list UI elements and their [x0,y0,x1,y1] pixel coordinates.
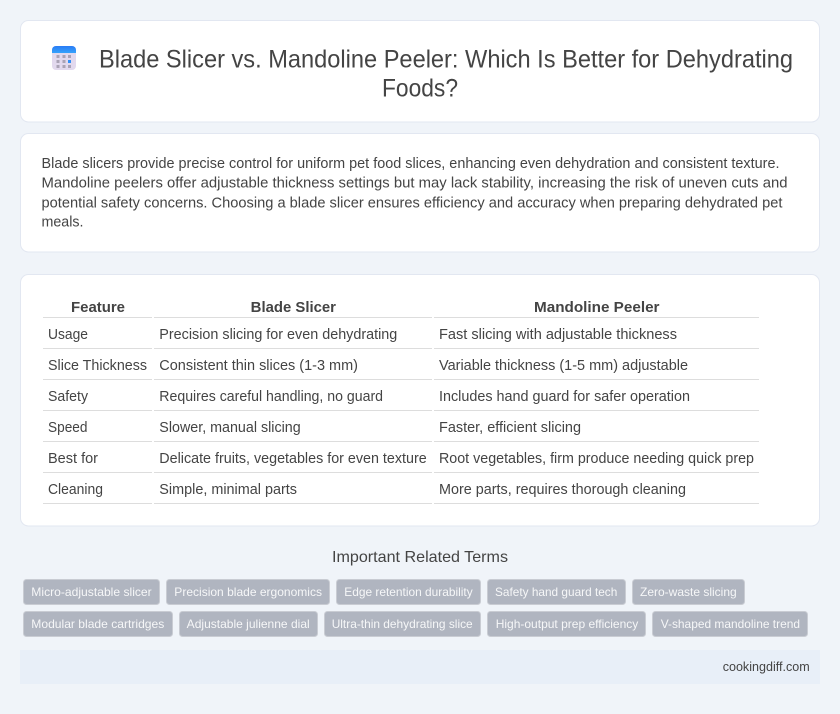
tag: modular blade cartridges: Modular blade cartridges [31,617,164,631]
row: slice thickness: Consistent thin slices (1-3 mm) [159,358,358,374]
row: safety [48,389,690,405]
table header row: Mandoline Peeler [534,300,660,316]
row: best for: Best for [48,451,98,467]
panel: comparison table [20,274,820,526]
row: best for [48,451,754,467]
tag: precision blade ergonomics [166,580,330,604]
panel: summary paragraph: Mandoline peelers offer adjustable thickness settings but may lack stability, increasing the risk of uneven cuts and [42,176,788,192]
row: usage: Precision slicing for even dehydrating [159,327,397,343]
row: speed [48,420,581,436]
heading: important related terms: Important Related Terms [332,549,508,566]
panel: title header [20,20,820,122]
row: usage [48,327,677,343]
tag: precision blade ergonomics: Precision blade ergonomics [174,585,322,599]
tag: adjustable julienne dial [180,612,318,636]
tag: micro-adjustable slicer: Micro-adjustable slicer [31,585,152,599]
tag: high-output prep efficiency [488,612,646,636]
title: Blade Slicer vs. Mandoline Peeler: Which Is Better for Dehydrating [99,46,793,74]
table header row: Blade Slicer [251,300,336,316]
row: best for: Root vegetables, firm produce needing quick prep [439,451,754,467]
tag: zero-waste slicing [632,580,744,604]
row: usage: Fast slicing with adjustable thickness [439,327,677,343]
tag: v-shaped mandoline trend: V-shaped mandoline trend [661,617,800,631]
title: Foods? [382,74,458,102]
tag: v-shaped mandoline trend [652,612,808,636]
tag: modular blade cartridges [24,612,172,636]
footer bar [20,650,820,684]
row: speed: Faster, efficient slicing [439,420,581,436]
panel: summary paragraph [20,134,820,252]
panel: summary paragraph: Blade slicers provide precise control for uniform pet food slices, enhancing even dehydration and consistent texture. [42,156,780,172]
tag: zero-waste slicing: Zero-waste slicing [640,585,737,599]
row: safety: Requires careful handling, no guard [159,389,383,405]
row: cleaning: Simple, minimal parts [159,482,297,498]
row: slice thickness [48,358,688,374]
table header row [71,300,660,316]
title [99,46,793,102]
row: best for: Delicate fruits, vegetables for even texture [159,451,427,467]
icon: calendar [52,46,76,70]
row: cleaning [48,482,686,498]
tag group: related terms [24,580,808,636]
tag: micro-adjustable slicer [24,580,160,604]
tag: ultra-thin dehydrating slice: Ultra-thin dehydrating slice [332,617,473,631]
tag: safety hand guard tech [488,580,626,604]
row: slice thickness: Variable thickness (1-5 mm) adjustable [439,358,688,374]
tag: edge retention durability: Edge retention durability [344,585,473,599]
row: cleaning: Cleaning [48,482,103,498]
row: cleaning: More parts, requires thorough cleaning [439,482,686,498]
tag: edge retention durability [336,580,480,604]
row: safety: Includes hand guard for safer operation [439,389,690,405]
row: safety: Safety [48,389,89,405]
tag: adjustable julienne dial: Adjustable julienne dial [187,617,310,631]
row: slice thickness: Slice Thickness [48,358,147,374]
row: speed: Speed [48,420,88,436]
tag: ultra-thin dehydrating slice [324,612,480,636]
panel: summary paragraph: meals. [42,214,84,230]
table header row: Feature [71,300,125,316]
row: usage: Usage [48,327,88,343]
row: speed: Slower, manual slicing [159,420,301,436]
tag: safety hand guard tech: Safety hand guard tech [495,585,617,599]
footer bar: cookingdiff.com [723,659,810,674]
panel: summary paragraph: potential safety concerns. Choosing a blade slicer ensures efficiency and accuracy when preparing dehydrated pet [42,196,783,212]
tag: high-output prep efficiency: High-output prep efficiency [496,617,638,631]
